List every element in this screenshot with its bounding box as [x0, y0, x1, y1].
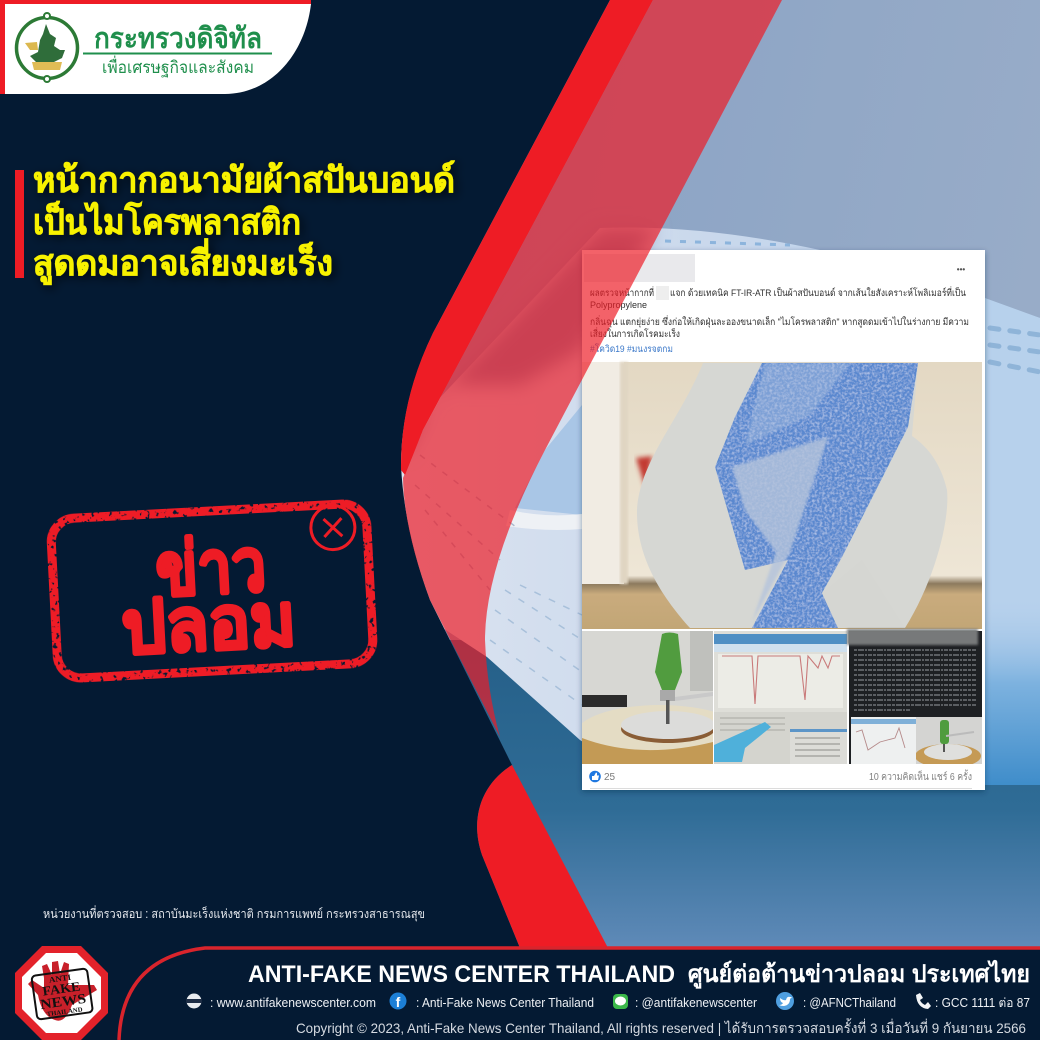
line id: : @antifakenewscenter — [635, 996, 757, 1010]
icon: facebook: f — [396, 994, 401, 1010]
stamp: fake news — [50, 503, 374, 679]
red curved band — [401, 0, 653, 475]
blurred account name — [584, 254, 695, 282]
header logo panel — [0, 0, 311, 94]
stamp text — [117, 522, 298, 670]
post text — [590, 286, 969, 355]
icon: red hand — [28, 961, 97, 1021]
comment and share count: 10 ความคิดเห็น แชร์ 6 ครั้ง — [869, 769, 972, 783]
ministry name: กระทรวงดิจิทัล — [94, 23, 262, 55]
navy background panel — [0, 0, 610, 948]
icon: ministry emblem — [16, 13, 78, 82]
twitter id: : @AFNCThailand — [803, 996, 896, 1010]
stop badge logo — [15, 946, 108, 1040]
stamp frame and text: ANTI — [48, 973, 72, 985]
icon: twitter — [776, 992, 794, 1010]
translucent red overlay band — [403, 0, 782, 737]
icon: X in circle — [310, 504, 356, 551]
facebook name: : Anti-Fake News Center Thailand — [416, 996, 594, 1010]
icon: website — [186, 994, 202, 1008]
red lower shape — [477, 765, 608, 948]
post text: แจก ด้วยเทคนิค FT-IR-ATR เป็นผ้าสปันบอนด์ จากเส้นใยสังเคราะห์โพลิเมอร์ที่เป็น — [670, 286, 966, 299]
icon: phone — [916, 993, 931, 1009]
icon: facebook — [390, 992, 406, 1010]
post menu dots: ••• — [957, 265, 965, 274]
post text: เสี่ยงในการเกิดโรคมะเร็ง — [590, 327, 680, 340]
background photo: surgical mask — [380, 0, 1040, 948]
footer heading: ANTI-FAKE NEWS CENTER THAILAND ศูนย์ต่อต้านข่าวปลอม ประเทศไทย — [248, 959, 1030, 989]
phone number: : GCC 1111 ต่อ 87 — [935, 996, 1030, 1010]
title: หน้ากากอนามัยผ้าสปันบอนด์ — [33, 160, 455, 200]
stamp text: ข่าว — [154, 523, 268, 612]
inspecting agency: หน่วยงานที่ตรวจสอบ : สถาบันมะเร็งแห่งชาติ กรมการแพทย์ กระทรวงสาธารณสุข — [43, 905, 425, 922]
title: เป็นไมโครพลาสติก — [33, 200, 301, 242]
title accent bar — [15, 170, 24, 278]
post text: กลิ่นฉุน แตกยุ่ยง่าย ซึ่งก่อให้เกิดฝุ่นละอองขนาดเล็ก "ไมโครพลาสติก" หากสูดดมเข้าไปในร่างกาย มีความ — [590, 315, 969, 328]
icon: line — [613, 994, 628, 1009]
sub photo: spectrum on screen — [714, 631, 847, 764]
sub photo: dark report screenshot — [847, 629, 982, 768]
icon: like — [589, 771, 601, 782]
sub photo: FT-IR instrument — [582, 631, 713, 764]
copyright line: Copyright © 2023, Anti-Fake News Center Thailand, All rights reserved | ได้รับการตรวจสอบครั้งที่ 3 เมื่อวันที่ 9 กันยายน 2566 — [296, 1018, 1026, 1036]
post text: Polypropylene — [590, 300, 647, 311]
title: สูดดมอาจเสี่ยงมะเร็ง — [33, 238, 333, 285]
stamp frame and text: NEWS — [40, 992, 87, 1013]
main photo: spunbond mask fabric — [582, 362, 982, 629]
title — [33, 160, 455, 285]
stamp frame and text: THAILAND — [46, 1006, 83, 1018]
website: : www.antifakenewscenter.com — [210, 996, 376, 1010]
facebook post card — [575, 250, 985, 790]
stamp frame and text — [31, 968, 93, 1020]
stamp text: ปลอม — [120, 578, 298, 670]
like count: 25 — [604, 772, 616, 783]
post text: ผลตรวจหน้ากากที่ — [590, 286, 654, 299]
footer panel — [0, 946, 1040, 1040]
post text: #โควิด19 #มนงรจตกม — [590, 343, 673, 355]
stamp frame and text: FAKE — [42, 978, 81, 999]
ministry slogan: เพื่อเศรษฐกิจและสังคม — [102, 55, 254, 78]
